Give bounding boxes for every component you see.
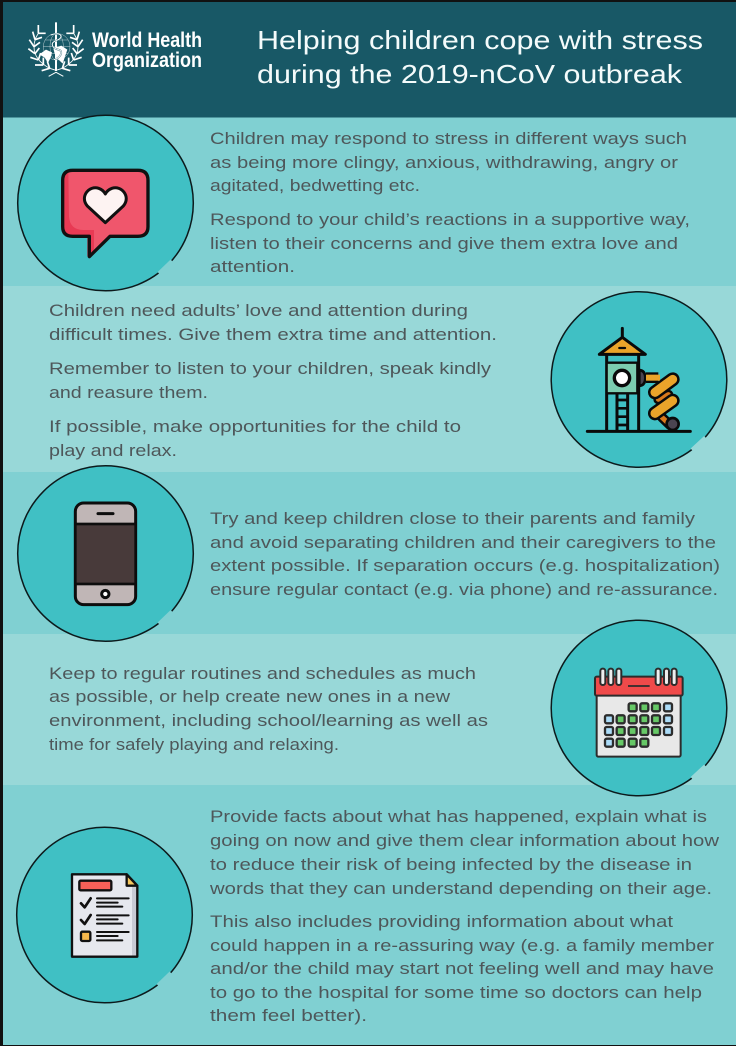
panel 2 text: play and relax. <box>49 441 177 460</box>
header band <box>3 2 736 118</box>
panel 1 text: listen to their concerns and give them extra love and <box>210 234 678 253</box>
panel 2 text: If possible, make opportunities for the child to <box>49 417 461 436</box>
panel 4 text: time for safely playing and relaxing. <box>49 735 339 754</box>
icon: playground slide tower <box>587 328 690 431</box>
panel 4 text: Keep to regular routines and schedules as much <box>49 664 476 683</box>
panel 5 text: to reduce their risk of being infected by the disease in <box>210 855 692 874</box>
panel 5 text: and/or the child may start not feeling well and may have <box>210 959 714 978</box>
band 3 <box>3 472 736 634</box>
panel 5 text: going on now and give them clear information about how <box>210 831 720 850</box>
panel 5 circle <box>17 827 192 1003</box>
panel 2 circle <box>551 292 727 467</box>
panel 3 text: and avoid separating children and their caregivers to the <box>210 533 716 552</box>
band 5 <box>3 785 736 1045</box>
title: during the 2019-nCoV outbreak <box>257 59 683 89</box>
panel 4 text: environment, including school/learning as well as <box>49 711 488 730</box>
panel 1 circle <box>18 115 193 291</box>
WHO logo wordmark: Organization <box>92 49 202 72</box>
panel 2 text <box>49 301 497 460</box>
panel 1 text: agitated, bedwetting etc. <box>210 176 420 195</box>
title <box>257 25 703 89</box>
panel 1 text: as being more clingy, anxious, withdrawing, angry or <box>210 153 678 172</box>
panel 1 text: attention. <box>210 257 295 276</box>
panel 5 text: could happen in a re-assuring way (e.g. a family member <box>210 936 714 955</box>
band 4 <box>3 634 736 785</box>
panel 1 text: Children may respond to stress in different ways such <box>210 129 687 148</box>
panel 5 text: them feel better). <box>210 1006 367 1025</box>
WHO logo emblem <box>28 22 84 76</box>
panel 2 text: difficult times. Give them extra time and attention. <box>49 325 497 344</box>
panel 2 text: Remember to listen to your children, speak kindly <box>49 359 492 378</box>
WHO logo wordmark <box>92 29 202 72</box>
panel 5 text <box>209 807 720 1025</box>
band 2 <box>3 286 736 472</box>
title: Helping children cope with stress <box>257 25 703 55</box>
panel 2 text: Children need adults’ love and attention during <box>49 301 468 320</box>
panel 4 circle <box>551 620 727 796</box>
panel 5 text: This also includes providing information about what <box>210 912 673 931</box>
panel 3 circle <box>18 466 193 641</box>
band 1 <box>3 118 736 286</box>
panel 5 text: words that they can understand depending on their age. <box>209 879 712 898</box>
panel 2 text: and reasure them. <box>49 383 208 402</box>
icon: mobile phone <box>75 503 136 605</box>
icon: heart speech bubble <box>63 170 148 257</box>
panel 3 text: ensure regular contact (e.g. via phone) and re-assurance. <box>210 580 718 599</box>
icon: calendar <box>595 669 683 757</box>
panel 4 text: as possible, or help create new ones in a new <box>49 687 451 706</box>
panel 1 text: Respond to your child’s reactions in a supportive way, <box>210 210 690 229</box>
panel 3 text: Try and keep children close to their parents and family <box>210 509 696 528</box>
WHO logo wordmark: World Health <box>92 29 202 52</box>
panel 5 text: to go to the hospital for some time so doctors can help <box>210 983 702 1002</box>
panel 3 text <box>210 509 720 599</box>
icon: checklist document <box>72 874 137 957</box>
panel 1 text <box>210 129 690 276</box>
panel 3 text: extent possible. If separation occurs (e.g. hospitalization) <box>210 556 720 575</box>
panel 4 text <box>49 664 488 754</box>
panel 5 text: Provide facts about what has happened, explain what is <box>210 807 707 826</box>
